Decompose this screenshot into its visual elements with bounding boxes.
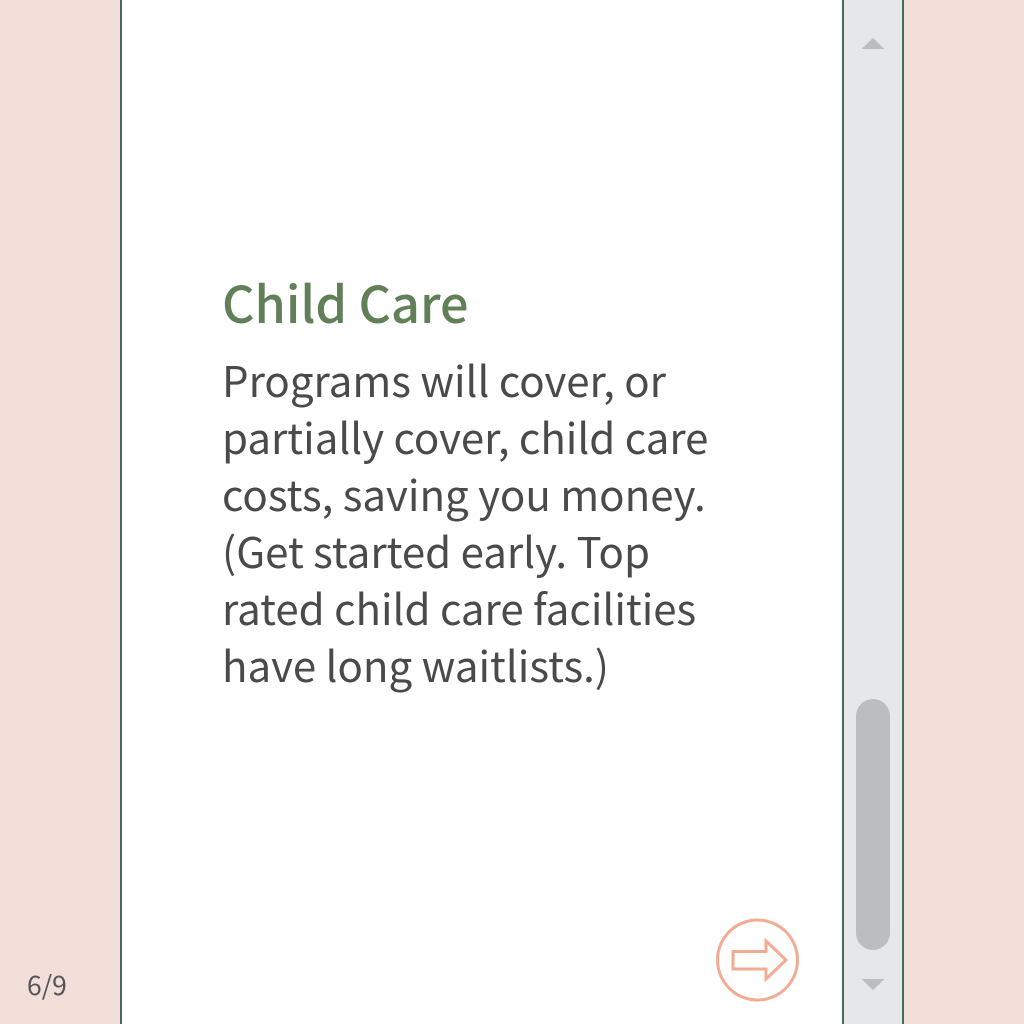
panel: white content card (120, 0, 844, 1024)
text block: body copy: have long waitlists.) (222, 634, 609, 695)
page number: 6/9 (27, 964, 67, 1003)
heading: Child Care (222, 265, 469, 338)
text block: body copy (222, 349, 708, 695)
text block: body copy: rated child care facilities (222, 577, 696, 638)
text block: body copy: partially cover, child care (222, 406, 708, 467)
icon: scroll up triangle (862, 38, 884, 49)
text block: body copy: Programs will cover, or (222, 349, 666, 410)
icon: scroll down triangle (862, 979, 884, 990)
text block: body copy: costs, saving you money. (222, 463, 706, 524)
scrollbar thumb (856, 699, 890, 950)
text block: body copy: (Get started early. Top (222, 520, 650, 581)
icon: next arrow button (716, 918, 799, 1002)
panel: scrollbar (844, 0, 904, 1024)
